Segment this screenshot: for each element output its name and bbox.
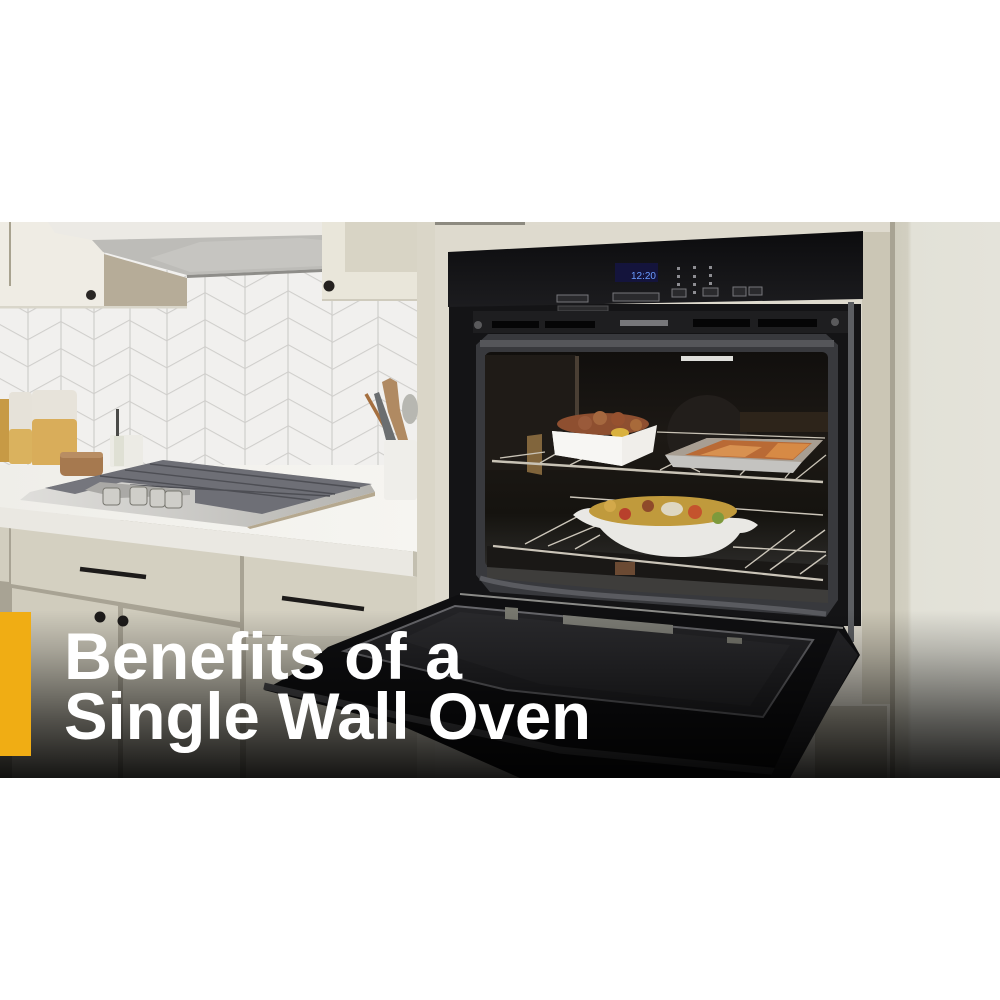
utensil crock <box>366 378 418 500</box>
oven cavity <box>476 334 838 617</box>
range hood <box>48 222 322 278</box>
dark bottom gradient overlay <box>0 610 1000 778</box>
oven control panel <box>448 231 863 311</box>
countertop <box>0 465 417 577</box>
food dish: square white baker <box>552 411 657 466</box>
right wall panel <box>895 222 1000 778</box>
title line 2: Single Wall Oven <box>64 679 591 753</box>
storage jars <box>0 390 77 467</box>
food dish: oval white casserole <box>573 496 758 557</box>
yellow accent bar <box>0 612 31 756</box>
upper right cabinet <box>322 222 417 301</box>
oven surround cabinet <box>435 222 895 778</box>
oven vent strip <box>473 311 850 333</box>
oven control panel: 12:20 <box>631 271 656 282</box>
upper oven rack <box>492 432 826 482</box>
lower oven rack <box>493 497 826 580</box>
infographic canvas <box>0 222 1000 778</box>
title line 1: Benefits of a <box>64 619 463 693</box>
cabinet column beside oven <box>417 222 435 778</box>
lower cabinets <box>0 520 417 778</box>
oven side rail <box>848 302 854 642</box>
gas cooktop <box>20 460 375 529</box>
food tray: sheet pan <box>665 438 823 473</box>
upper left cabinet <box>0 222 187 308</box>
wooden board and oil dispenser <box>60 409 143 476</box>
oven body <box>449 304 861 626</box>
title <box>64 619 591 753</box>
open oven door <box>264 594 860 778</box>
backsplash chevron tile wall <box>0 239 417 514</box>
photo: kitchen scene <box>0 192 1000 778</box>
